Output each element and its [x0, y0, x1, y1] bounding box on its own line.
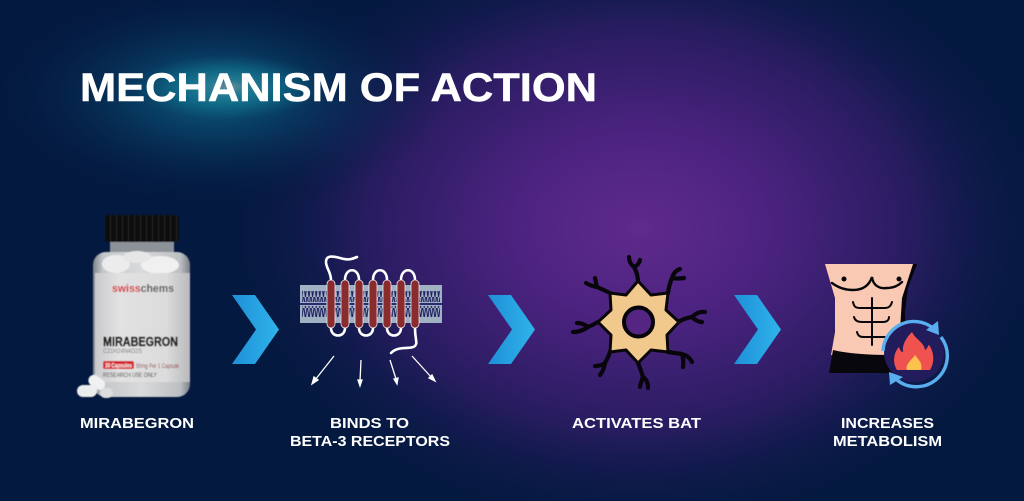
flame [894, 332, 933, 370]
torso shadow [895, 264, 917, 345]
research note: RESEARCH USE ONLY [103, 372, 157, 379]
formula: C21H24N4O2S [103, 349, 142, 355]
capsules badge [103, 361, 134, 369]
icon: brown adipose cell [573, 257, 705, 388]
product name: MIRABEGRON [103, 335, 178, 349]
label: increases metabolism [833, 416, 942, 450]
label: binds to beta-3 receptors [290, 416, 450, 450]
label: activates bat: ACTIVATES BAT [572, 416, 701, 432]
protein loops [326, 257, 416, 353]
label: binds to beta-3 receptors: BINDS TO [330, 416, 409, 432]
icon: torso with metabolism flame [825, 264, 947, 387]
brand name: swisschems [112, 283, 174, 295]
icon: beta-3 receptor [300, 257, 442, 386]
cell nucleus [624, 308, 653, 336]
bottle cap [105, 215, 179, 242]
icon: mirabegron bottle [77, 215, 190, 398]
torso [825, 264, 913, 355]
arrow 1 [232, 295, 279, 364]
arrow 3 [734, 295, 781, 364]
bottle label [95, 273, 190, 382]
bottle neck [110, 241, 174, 253]
arrow 2 [488, 295, 535, 364]
label: mirabegron: MIRABEGRON [80, 416, 194, 432]
signal arrows [312, 356, 435, 386]
icon: mirabegron bottle: 30 Capsules [105, 364, 133, 370]
muscle lines [832, 277, 902, 345]
dosage: 50mg Per 1 Capsule [136, 364, 180, 370]
refresh ring [883, 321, 947, 387]
transmembrane helices [327, 280, 419, 328]
shorts [829, 350, 892, 373]
bottle glass [93, 252, 190, 397]
cell membrane [300, 285, 442, 323]
title: MECHANISM OF ACTION [80, 66, 597, 110]
loose capsules [77, 373, 113, 398]
label: binds to beta-3 receptors: BETA-3 RECEPTORS [290, 434, 450, 450]
label: increases metabolism: INCREASES [841, 416, 934, 432]
cell body [598, 281, 679, 363]
label: increases metabolism: METABOLISM [833, 434, 942, 450]
cell dendrites [573, 257, 705, 388]
